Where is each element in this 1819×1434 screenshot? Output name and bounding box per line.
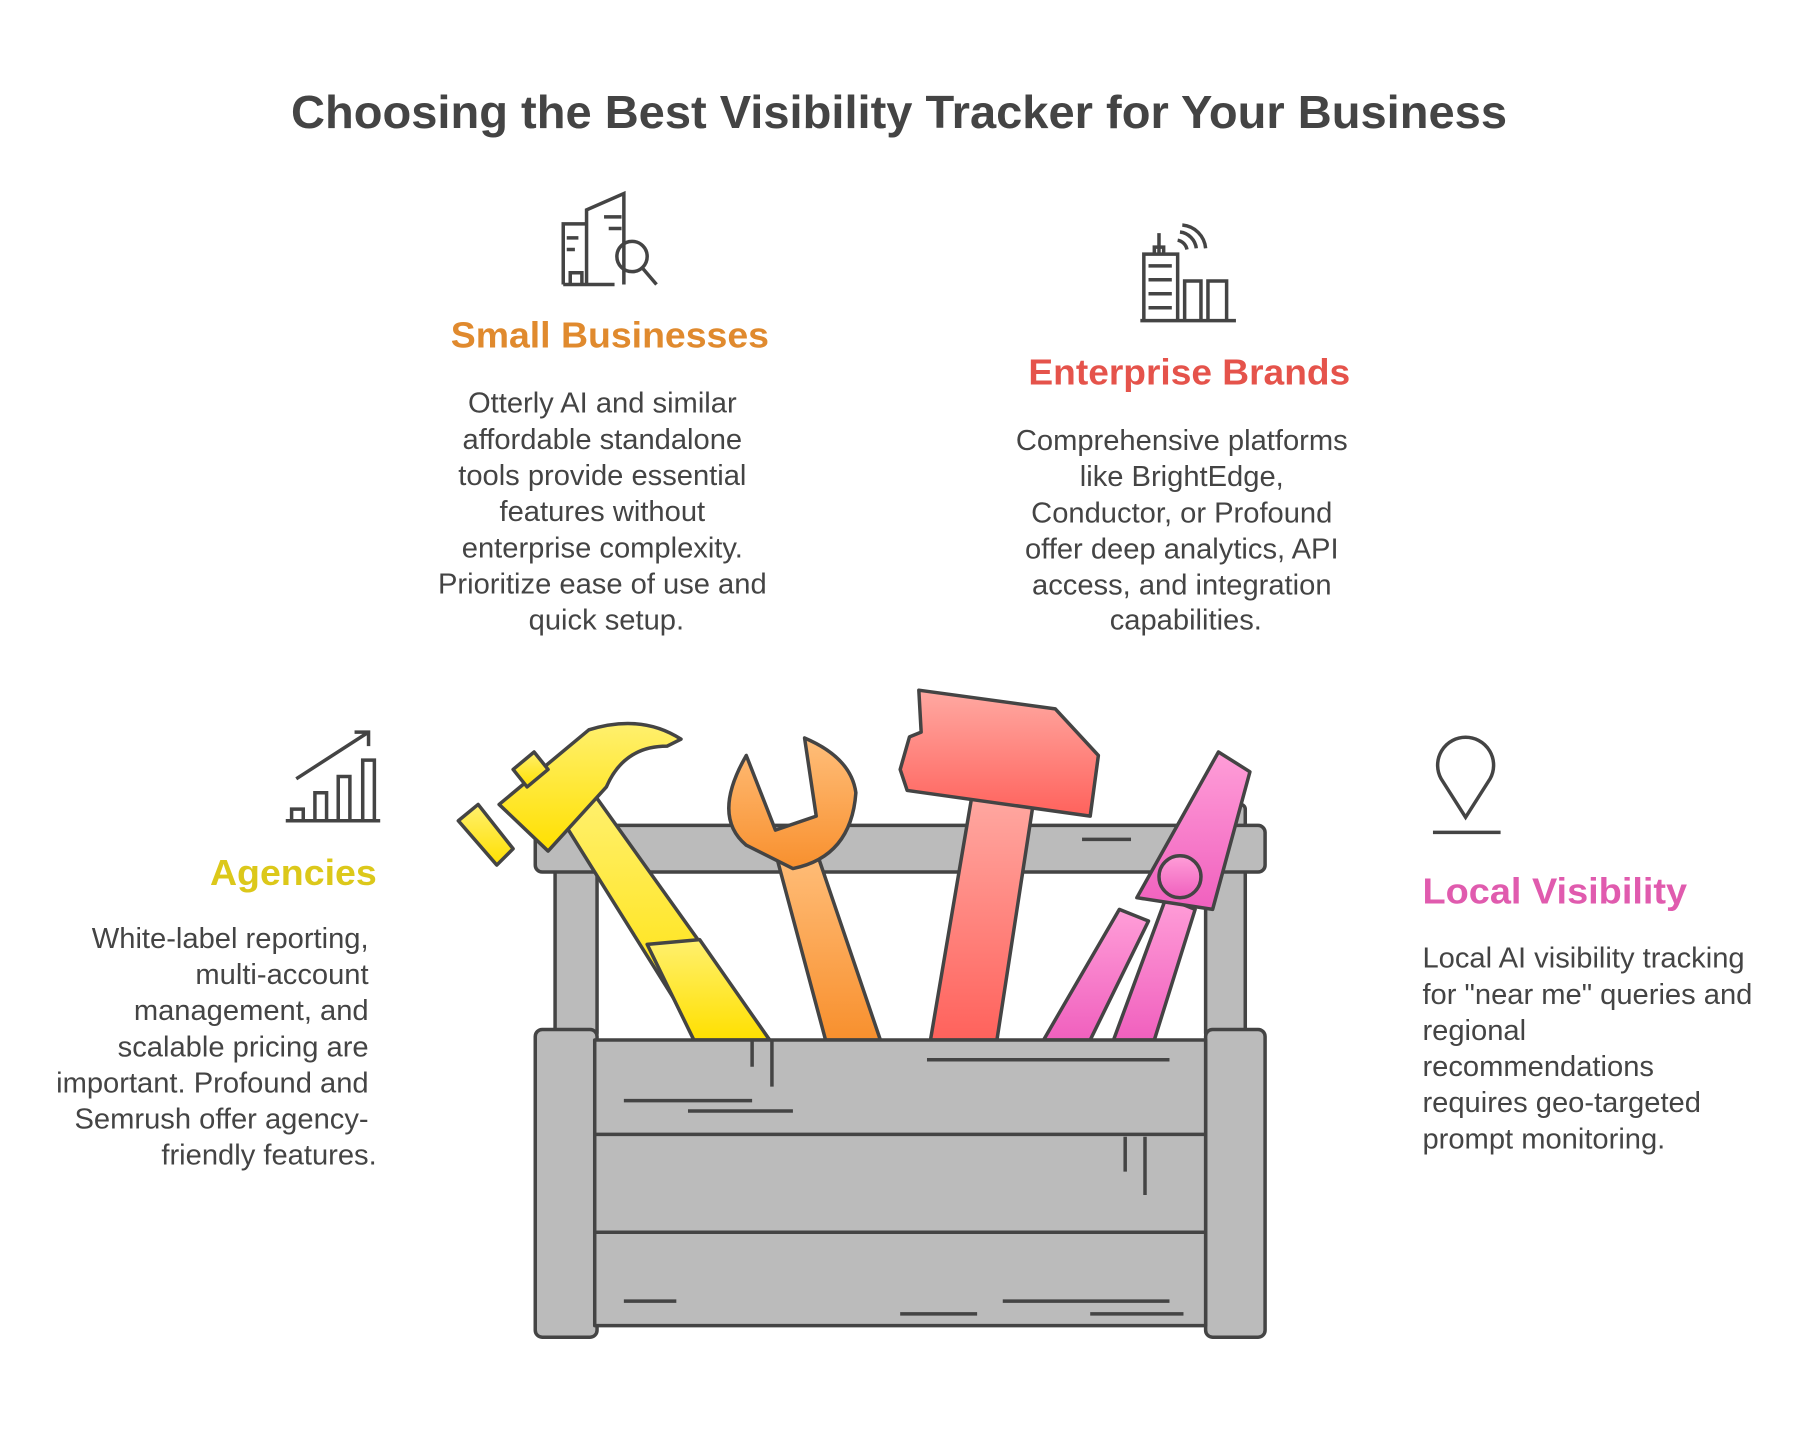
text: local body: recommendations	[1422, 1051, 1654, 1083]
text: enterprise body: offer deep analytics, API	[1025, 533, 1339, 565]
icon: buildings with magnifier	[563, 194, 657, 284]
text: small businesses body: Otterly AI and similar	[468, 388, 737, 420]
text: agencies body: important. Profound and	[56, 1067, 369, 1099]
toolbox illustration	[458, 690, 1265, 1337]
heading: Small Businesses: Small Businesses	[451, 314, 769, 355]
icon: location pin	[1433, 737, 1501, 832]
heading: Agencies: Agencies	[210, 852, 377, 893]
text: small businesses body: tools provide essential	[458, 460, 746, 492]
text: agencies body: management, and	[134, 995, 369, 1027]
text: agencies body: White-label reporting,	[92, 923, 369, 955]
text: enterprise body: like BrightEdge,	[1080, 461, 1284, 493]
text: small businesses body: enterprise complexity.	[462, 532, 743, 564]
tool: orange wrench	[729, 738, 880, 1040]
heading: Enterprise Brands: Enterprise Brands	[1028, 352, 1350, 393]
icon: enterprise building with signal	[1140, 225, 1236, 321]
text: enterprise body: access, and integration	[1032, 570, 1332, 602]
text: small businesses body: Prioritize ease of use and	[438, 568, 767, 600]
tool: red mallet	[900, 690, 1098, 1040]
text: local body: prompt monitoring.	[1422, 1123, 1665, 1155]
toolbox body	[535, 839, 1265, 1337]
toolbox top rail and posts	[535, 804, 1265, 1038]
text: local body: for "near me" queries and	[1422, 979, 1752, 1011]
text: local body: requires geo-targeted	[1422, 1087, 1701, 1119]
text: enterprise body: Comprehensive platforms	[1016, 425, 1348, 457]
text: small businesses body: quick setup.	[529, 605, 684, 637]
text: agencies body: friendly features.	[161, 1140, 377, 1172]
icon: growth chart	[286, 732, 380, 821]
tool: pink pliers	[1044, 752, 1250, 1040]
title: Choosing the Best Visibility Tracker for Your Business	[291, 86, 1507, 138]
text: agencies body: Semrush offer agency-	[75, 1104, 369, 1136]
text: local body: Local AI visibility tracking	[1422, 943, 1745, 975]
text: small businesses body: affordable standalone	[463, 424, 742, 456]
text: agencies body: multi-account	[195, 959, 369, 991]
text: local body: regional	[1422, 1015, 1526, 1047]
heading: Local Visibility: Local Visibility	[1422, 871, 1687, 912]
tool: yellow hammer	[458, 723, 770, 1040]
text: small businesses body: features without	[500, 496, 705, 528]
text: enterprise body: capabilities.	[1110, 605, 1262, 637]
text: enterprise body: Conductor, or Profound	[1031, 497, 1332, 529]
text: agencies body: scalable pricing are	[118, 1031, 369, 1063]
